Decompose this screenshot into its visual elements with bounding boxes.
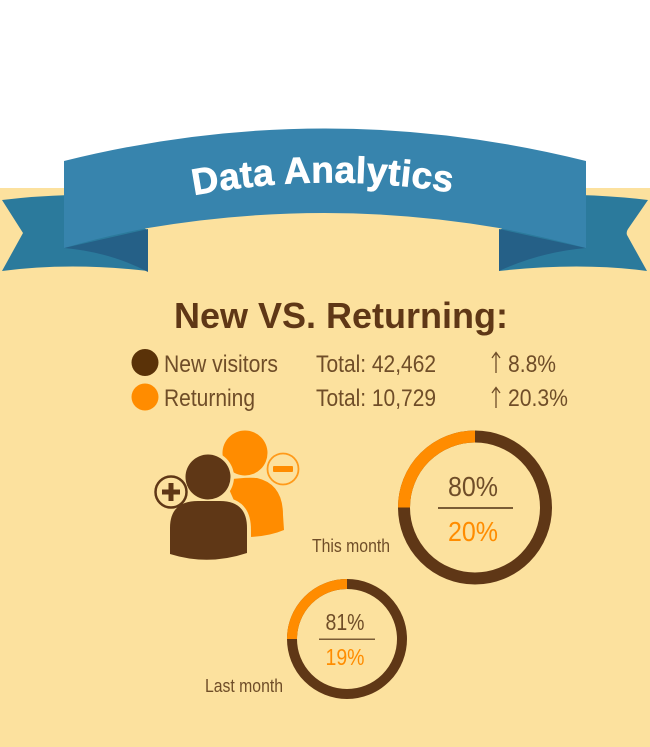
legend: returning: Total: 10,729 [316,385,436,412]
legend: new visitors: New visitors [164,351,278,378]
swatch: new visitors [132,349,158,376]
ribbon right fold [499,229,586,271]
new user [166,451,251,564]
label: last month: Last month [205,676,283,696]
label: this month: This month [312,536,390,556]
ribbon left fold [64,229,148,272]
legend: returning: 20.3% [508,385,568,412]
arrow up [492,388,500,408]
legend: new visitors [132,349,556,378]
returning user [222,430,284,537]
legend: new visitors: 8.8% [508,351,556,378]
ribbon left tail [2,195,148,271]
minus badge [268,454,298,484]
ribbon main band [64,128,586,248]
arrow up [492,352,500,373]
ribbon right tail [499,195,648,271]
plus badge [156,476,186,508]
donut: last month: 81% [326,609,364,635]
donut: this month: 80% [448,471,498,502]
donut: last month [292,584,402,694]
heading: New VS. Returning: [174,295,508,336]
donut: this month [404,436,546,578]
legend: returning [132,384,568,412]
ribbon title: Data Analytics [192,156,452,196]
title ribbon [2,128,648,272]
icon: users [156,430,298,564]
donut: last month: 19% [326,644,364,670]
donut: this month: 20% [448,516,498,547]
legend: returning: Returning [164,385,255,412]
legend: new visitors: Total: 42,462 [316,351,436,378]
swatch: returning [132,384,158,410]
